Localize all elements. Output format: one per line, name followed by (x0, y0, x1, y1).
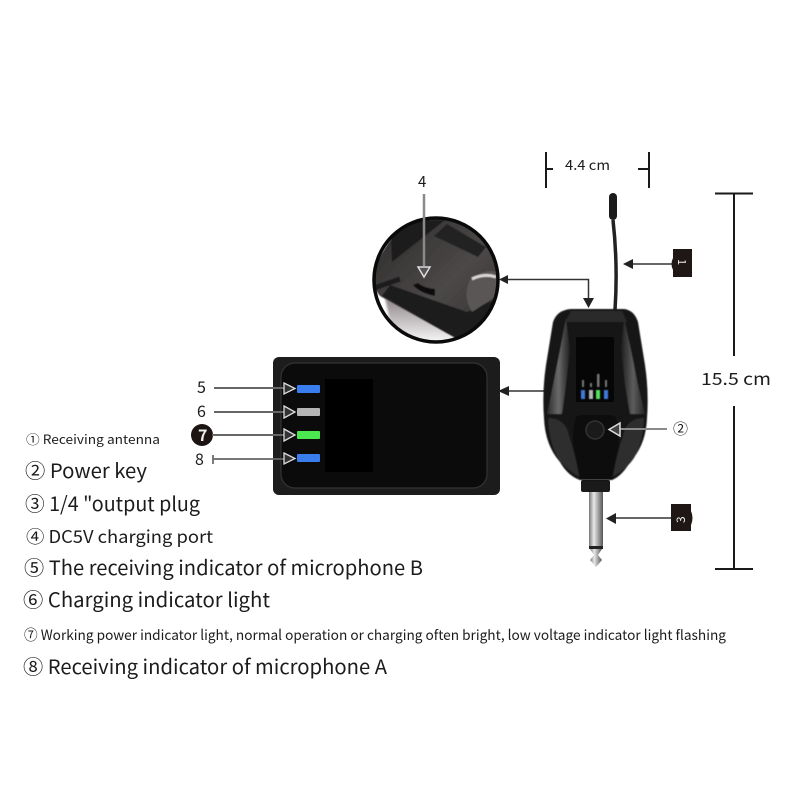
legend item 1: ① Receiving antenna (26, 429, 160, 448)
legend item 7: ⑦ Working power indicator light, normal operation or charging often bright, low voltage indicator light flashing (24, 625, 726, 645)
dimension: width 4.4 cm (546, 152, 649, 188)
housing (543, 309, 648, 480)
label 3 tag with arrow to plug: 3 (672, 516, 689, 523)
legend item 6: ⑥ Charging indicator light (23, 584, 270, 613)
panel: enlarged indicator display (273, 357, 500, 495)
label 2 with arrow to power key: ② (673, 418, 688, 439)
indicator LEDs (581, 374, 608, 399)
antenna (613, 220, 616, 310)
screen (576, 337, 614, 402)
label 4 with arrow to port (418, 171, 430, 277)
output plug (581, 480, 610, 567)
label 7 badge with arrow: 7 (198, 422, 207, 446)
label 6 with arrow: 6 (197, 398, 206, 422)
legend: numbered list (23, 429, 726, 680)
legend item 5: ⑤ The receiving indicator of microphone B (24, 552, 423, 581)
label 1 tag with arrow to antenna (623, 249, 692, 277)
label 8 with arrow (195, 446, 295, 470)
label 3 tag with arrow to plug (606, 504, 692, 531)
legend item 3: ③ 1/4 "output plug (25, 488, 200, 517)
LED 8 blue (297, 454, 320, 462)
arrow: display to device (498, 385, 578, 397)
legend item 8: ⑧ Receiving indicator of microphone A (23, 651, 388, 680)
label 2 with arrow to power key (609, 418, 688, 439)
power button (586, 421, 604, 439)
label 4 with arrow to port: 4 (418, 171, 426, 192)
legend item 4: ④ DC5V charging port (26, 524, 213, 549)
LED 6 grey (297, 408, 320, 416)
dimension: width 4.4 cm: 4.4 cm (565, 155, 610, 175)
label 7 badge with arrow (191, 422, 295, 446)
LED 5 blue (297, 385, 320, 393)
device: wireless receiver (543, 193, 648, 567)
label 5 with arrow (197, 374, 295, 398)
LED 7 green (297, 431, 320, 439)
label 6 with arrow (197, 398, 295, 422)
dimension: height 15.5 cm (701, 193, 771, 569)
detail circle: charging port close-up (372, 218, 500, 345)
label 5 with arrow: 5 (197, 374, 206, 398)
arrow: port detail to device top (499, 275, 594, 308)
legend item 2: ② Power key (25, 455, 148, 484)
dimension: height 15.5 cm: 15.5 cm (701, 365, 771, 390)
label 8 with arrow: 8 (195, 446, 204, 470)
label 1 tag with arrow to antenna: 1 (674, 259, 690, 265)
